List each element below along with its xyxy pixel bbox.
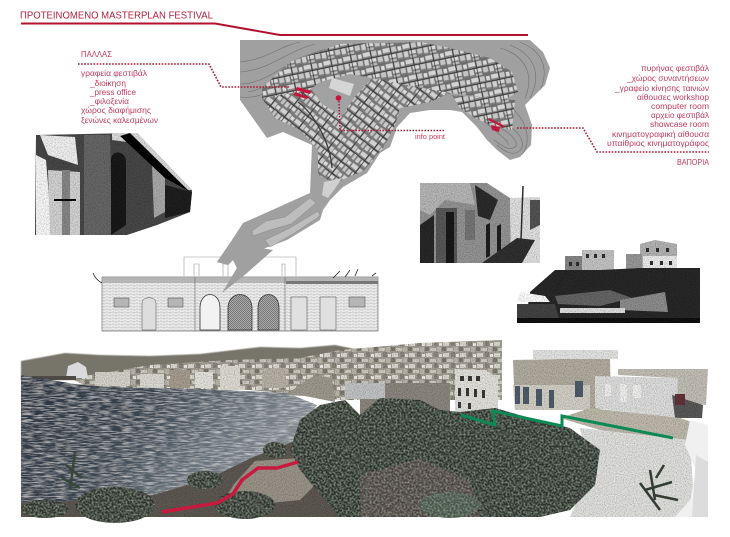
label: Pallas: ΠΑΛΛΑΣ — [81, 50, 112, 59]
lower town blocks — [262, 78, 450, 183]
text: Vaporia programme: showcase room — [650, 120, 709, 129]
map: town masterplan — [217, 40, 550, 293]
lighter storey — [513, 385, 590, 410]
dotted line: Vaporia — [517, 128, 709, 152]
text: Pallas programme: _φιλοξενία — [89, 97, 129, 106]
marker dot — [336, 95, 341, 101]
apartment windows — [458, 376, 485, 409]
pavement — [482, 238, 535, 263]
windows and doors — [114, 297, 365, 330]
large trees — [290, 398, 600, 518]
waterfront buildings — [95, 366, 286, 390]
white shutter — [40, 135, 78, 165]
end shadow — [165, 185, 192, 218]
pier buildings — [252, 198, 320, 247]
right buildings — [345, 350, 708, 517]
foreground bushes — [21, 442, 287, 523]
text: Pallas programme: γραφεία φεστιβάλ — [81, 69, 147, 78]
dotted line: Pallas — [78, 64, 290, 87]
elevation drawing: Pallas building — [93, 257, 378, 331]
white apartment — [455, 369, 498, 418]
gap in hill — [517, 292, 550, 302]
text: Pallas programme: _press office — [89, 88, 137, 97]
stained top — [420, 183, 475, 215]
quay — [517, 318, 700, 323]
red car — [675, 394, 685, 405]
upper town blocks — [262, 42, 518, 100]
green wall overlay — [461, 411, 673, 438]
vertical joint — [195, 277, 285, 331]
left dark plaster — [420, 215, 434, 263]
retaining wall — [620, 292, 668, 312]
bright wall patch — [152, 165, 165, 218]
text: Vaporia programme: αρχείο φεστιβάλ — [651, 111, 709, 120]
eaves — [112, 133, 192, 190]
text: Pallas programme: χώρος διαφήμισης — [81, 106, 151, 115]
white door panels — [36, 155, 52, 235]
text: Pallas programme: _διοίκηση — [89, 79, 126, 88]
arch 1 — [200, 294, 220, 330]
house 3 — [640, 240, 677, 268]
far building — [530, 200, 540, 230]
white rooftop strip — [533, 350, 618, 359]
house 2 — [582, 250, 614, 270]
map base — [217, 40, 550, 293]
plaza — [313, 85, 353, 113]
west red building — [293, 87, 312, 99]
photo: hillside buildings — [517, 240, 700, 323]
terraces — [555, 290, 632, 306]
far openings — [486, 223, 501, 258]
label: info point: info point — [415, 132, 446, 141]
pale roofs — [345, 383, 385, 399]
rooftop vegetation — [93, 269, 376, 283]
panorama photo — [21, 340, 708, 523]
large block by plaza — [329, 78, 354, 96]
dead bush — [640, 465, 678, 510]
text: Vaporia programme: κινηματογραφική αίθουσα — [612, 130, 709, 139]
shutters — [515, 381, 583, 408]
arches — [200, 294, 279, 330]
white house — [643, 256, 677, 270]
title rule — [21, 24, 528, 35]
waterfront pavilions — [560, 308, 625, 313]
hills — [21, 345, 360, 380]
photo: warehouse street — [35, 133, 192, 235]
door — [436, 208, 457, 263]
damp patch — [475, 185, 498, 220]
arch 2 — [228, 294, 252, 330]
window shutter — [465, 210, 475, 240]
terrace rubble — [560, 408, 700, 445]
brown shrubs — [360, 458, 480, 517]
pine sapling — [62, 452, 82, 490]
east red building — [488, 118, 505, 132]
sky and far buildings — [510, 197, 540, 263]
text: Vaporia programme — [607, 64, 710, 167]
info point marker — [336, 95, 446, 141]
hill and trees — [520, 268, 700, 323]
background house — [618, 369, 708, 405]
dark wood frame — [62, 170, 70, 235]
utility pole — [521, 186, 523, 240]
upper volume — [184, 257, 296, 276]
arch 3 — [258, 294, 279, 330]
text: Vaporia programme: _γραφείο κίνησης ταινιών — [614, 84, 709, 93]
town — [70, 340, 502, 400]
alley wall — [420, 183, 511, 263]
title: ΠΡΟΤΕΙΝΟΜΕΝΟ MASTERPLAN FESTIVAL — [20, 10, 213, 22]
east quarter blocks — [452, 95, 515, 130]
harbour blocks — [322, 178, 342, 198]
text: Vaporia programme: αίθουσες workshop — [637, 93, 710, 102]
cornice — [102, 277, 378, 283]
house 4 — [626, 254, 642, 271]
white house — [595, 376, 678, 418]
balcony shade — [692, 455, 708, 517]
red path overlay — [162, 462, 298, 512]
text: Pallas programme: ξενώνες καλεσμένων — [81, 116, 158, 125]
chimneys — [194, 264, 285, 276]
whitewashed wall — [570, 428, 695, 517]
text: Vaporia programme: υπαίθριος κινηματογράφος — [607, 139, 709, 148]
dotted leader — [339, 101, 444, 130]
text: Vaporia programme: computer room — [651, 102, 709, 111]
text: Pallas programme — [81, 50, 158, 125]
right cornice band — [286, 281, 378, 284]
arch doorway — [111, 152, 126, 235]
white ferry — [66, 362, 88, 378]
rocky cliff — [285, 375, 335, 402]
roof shadow — [120, 133, 190, 192]
text: Vaporia programme: _χώρος συναντήσεων — [626, 74, 709, 83]
sea wall — [517, 304, 560, 323]
foreground shore — [21, 420, 400, 517]
stone facade — [102, 277, 378, 331]
water — [21, 375, 317, 503]
door latch — [54, 199, 76, 201]
path clearing — [225, 458, 320, 505]
text: Vaporia programme: ΒΑΠΟΡΙΑ — [677, 158, 710, 167]
far town block — [360, 383, 450, 415]
line 1: πυρήνας φεστιβάλ — [641, 64, 709, 73]
pier tip over elevation — [217, 243, 273, 293]
white balcony — [675, 420, 708, 517]
map contours — [240, 42, 544, 155]
photo: old alley — [420, 183, 540, 263]
windows — [569, 248, 672, 266]
door panel — [446, 212, 454, 263]
main curved road — [298, 102, 332, 168]
warehouse wall — [35, 133, 192, 235]
white house openings — [605, 384, 641, 402]
street — [672, 395, 703, 418]
far shore — [21, 376, 76, 380]
house 1 — [565, 256, 584, 272]
lighter foliage — [420, 492, 480, 518]
beige house — [513, 358, 611, 410]
stone wall — [84, 135, 112, 235]
